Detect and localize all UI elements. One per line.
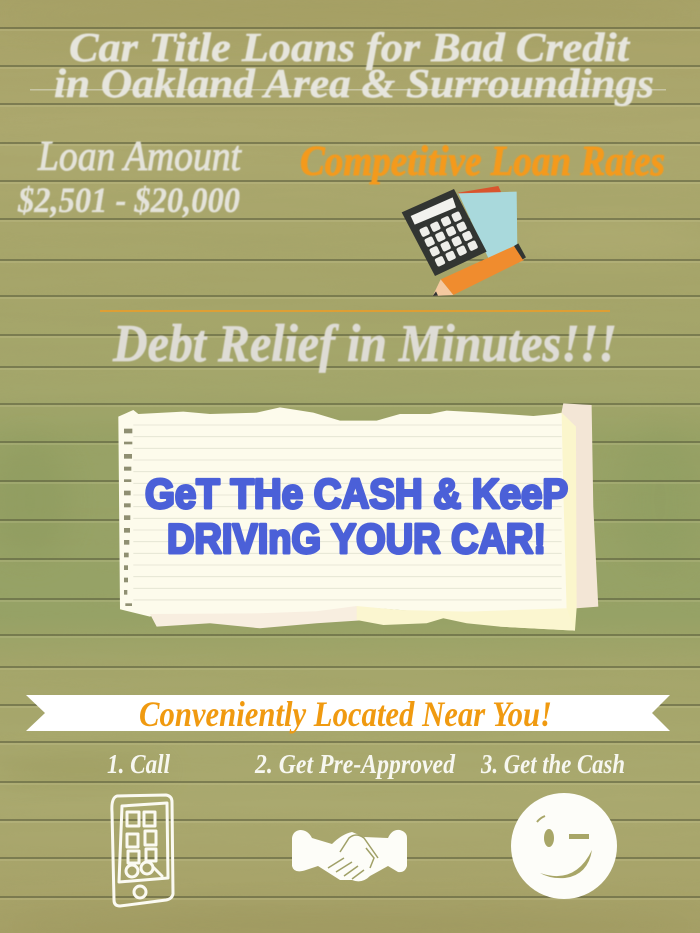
- title: in Oakland Area & Surroundings: [54, 60, 654, 106]
- notepaper binding holes: [124, 429, 132, 606]
- title: [54, 24, 654, 106]
- loan amount block: $2,501 - $20,000: [17, 180, 240, 220]
- panel: torn notepaper: [118, 403, 598, 631]
- title: Car Title Loans for Bad Credit: [69, 24, 631, 70]
- step labels: 3. Get the Cash: [480, 749, 625, 779]
- step labels: 2. Get Pre-Approved: [254, 749, 455, 779]
- paper headline: DRIVInG YOUR CAR!: [167, 515, 546, 562]
- divider line: [100, 310, 610, 312]
- step labels: [107, 749, 625, 779]
- loan amount block: [17, 134, 242, 220]
- icon: handshake: [292, 830, 407, 881]
- icon: calculator and pencil: [402, 186, 526, 296]
- step labels: 1. Call: [107, 749, 170, 779]
- debt relief heading: Debt Relief in Minutes!!!: [112, 315, 617, 373]
- paper headline: [145, 470, 568, 562]
- paper headline: GeT THe CASH & KeeP: [145, 470, 568, 517]
- icon: phone: [112, 795, 173, 906]
- ribbon banner: [26, 694, 670, 734]
- ribbon text: Conveniently Located Near You!: [139, 694, 552, 734]
- icon: winking smiley: [511, 793, 617, 899]
- loan amount block: Loan Amount: [37, 134, 242, 180]
